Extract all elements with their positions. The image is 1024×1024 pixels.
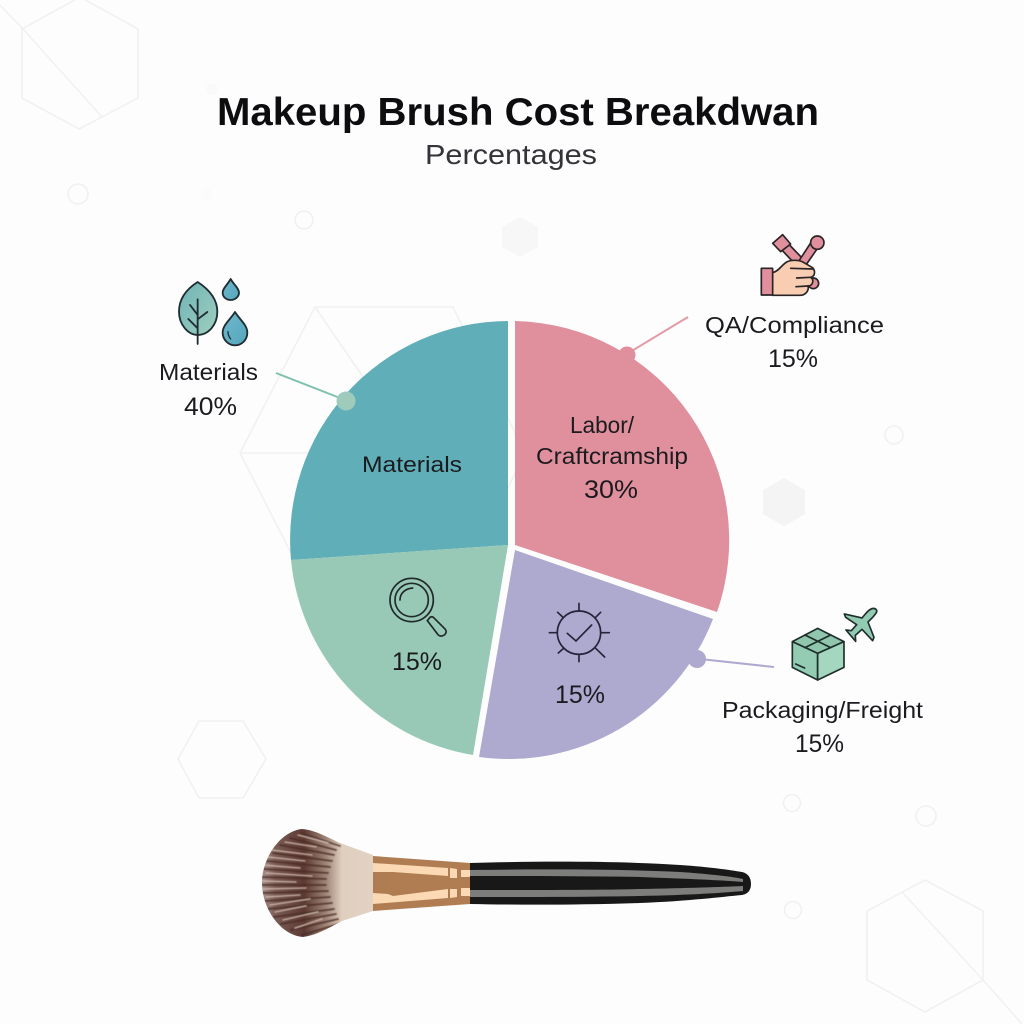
leader dot — [336, 392, 356, 410]
label: labor in slice — [536, 412, 688, 504]
text: QA/Compliance 15% — [705, 312, 884, 373]
leader line — [630, 317, 688, 352]
icon: sun with check — [549, 603, 609, 662]
label: lavender slice percent: 15% — [555, 681, 605, 709]
brush ferrule — [373, 856, 470, 911]
callout: materials — [159, 279, 356, 421]
text: QA/Compliance 15%: 15% — [768, 345, 818, 373]
slice: materials teal — [290, 321, 508, 560]
slice: labor pink — [515, 321, 729, 612]
icon: box and plane — [792, 608, 877, 680]
illustration: makeup brush — [255, 825, 751, 940]
text: Packaging/Freight 15%: 15% — [795, 730, 844, 758]
label: labor in slice: Craftcramship — [536, 443, 688, 469]
text: QA/Compliance 15%: QA/Compliance — [705, 312, 884, 338]
brush handle — [470, 862, 751, 905]
text: Materials 40%: Materials — [159, 359, 258, 385]
text: Packaging/Freight 15% — [722, 697, 924, 758]
label: labor in slice: 30% — [584, 476, 638, 504]
callout: QA/Compliance — [618, 235, 884, 373]
text: Materials 40% — [159, 359, 258, 421]
label: labor in slice: Labor/ — [570, 412, 635, 438]
text: Materials 40%: 40% — [184, 393, 237, 421]
leader dot — [688, 650, 706, 668]
leader line — [276, 373, 340, 398]
slice: lavender — [479, 550, 713, 759]
label: green slice percent: 15% — [392, 648, 442, 676]
brush bristles — [262, 829, 373, 937]
title: Makeup Brush Cost Breakdwan — [217, 91, 819, 134]
icon: leaf and water drops — [179, 279, 247, 345]
callout: Packaging/Freight — [688, 608, 924, 758]
icon: hand with tools — [761, 235, 824, 295]
leader dot — [618, 346, 636, 364]
slice: green — [291, 545, 508, 755]
text: Packaging/Freight 15%: Packaging/Freight — [722, 697, 924, 723]
pie chart — [290, 321, 729, 759]
icon: magnifier — [390, 578, 446, 636]
leader line — [700, 659, 774, 667]
subtitle: Percentages — [425, 139, 597, 170]
label: materials in slice: Materials — [362, 452, 462, 477]
